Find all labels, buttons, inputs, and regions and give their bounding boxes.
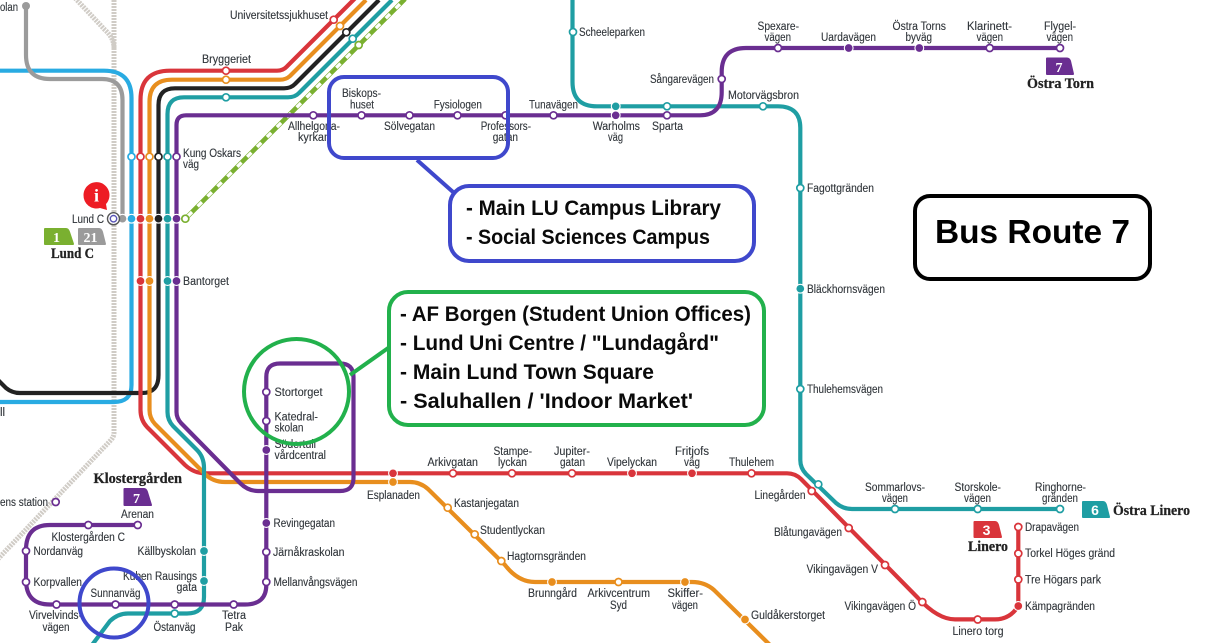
connector: town centre circle to callout [350, 346, 391, 375]
stop labels: north-east: Östra Torns [892, 21, 946, 33]
stop labels: south-east: Ringhorne- [1035, 482, 1086, 494]
highlight: campus stops box [329, 77, 508, 158]
stop labels: west and centre: kyrkan [298, 132, 330, 144]
callout: town centre destinations: - Main Lund Town Square [400, 361, 654, 384]
stop labels: red and orange centre: Brunngård [528, 588, 577, 600]
stops: teal [171, 28, 1063, 617]
stop labels: north-east: Flygel- [1044, 21, 1076, 33]
badge: route 7 Östra Torn [1047, 58, 1073, 76]
stop labels: north-east: Fagottgränden [807, 183, 874, 195]
stop labels: south-west: Tetra [222, 610, 247, 622]
stop labels: west and centre: Biskops- [342, 88, 381, 100]
badge: route 7 Östra Torn: 7 [1056, 61, 1062, 76]
line: gray route [26, 6, 122, 219]
stop labels: west and centre: Bryggeriet [202, 54, 252, 66]
stop labels: south-east: gränden [1042, 493, 1078, 505]
highlight: town centre circle [244, 339, 349, 444]
stop labels: red and orange centre: Thulehem [729, 457, 774, 469]
stop labels: south-west: Klostergården C [52, 532, 125, 544]
stop labels: west and centre: Motorvägsbron [728, 90, 799, 102]
stop labels: north-east: Bläckhornsvägen [807, 284, 885, 296]
stop labels: north-east: byväg [906, 32, 932, 44]
stop labels: north-east: Spexare- [758, 21, 799, 33]
stop labels: west and centre: Fysiologen [434, 100, 482, 112]
stop labels: south-west: Kuben Rausings [123, 571, 197, 583]
stop labels: red and orange centre: gatan [560, 457, 585, 469]
line: light blue route [0, 71, 132, 402]
stop labels: south-west: vägen [42, 622, 70, 634]
stop labels: west and centre: Sölvegatan [384, 121, 435, 133]
stop labels: south-east: vägen [882, 493, 908, 505]
stop labels: west and centre: Allhelgona- [288, 121, 340, 133]
stop labels: south-east: Kämpagränden [1025, 601, 1095, 613]
badge: route 1: 1 [53, 231, 60, 246]
heading: Klostergården: Klostergården [94, 471, 182, 487]
stop labels: south-west: gata [176, 582, 198, 594]
stop labels: red and orange centre: Fritjofs [675, 446, 709, 458]
stop labels: west and centre: Tunavägen [529, 100, 578, 112]
callout: town centre destinations [389, 292, 764, 425]
stop labels: south-west: Korpvallen [34, 577, 82, 589]
stop labels: west and centre: Sparta [652, 121, 684, 133]
stop labels: west and centre: Sångarevägen [650, 74, 714, 86]
highlight: Sunnanväg circle [80, 568, 148, 638]
railway track [0, 0, 114, 560]
stop labels: red and orange centre: Jupiter- [554, 446, 590, 458]
badge: route 6 [1083, 502, 1109, 518]
stop labels: south-west: vårdcentral [274, 450, 326, 462]
heading: Lund C: Lund C [51, 246, 94, 262]
stop labels: south-east: Torkel Höges gränd [1025, 548, 1115, 560]
stop labels: south-east: Linegården [754, 490, 806, 502]
stop labels: west and centre: Lund C [72, 214, 104, 226]
stop labels: west and centre: Warholms [593, 121, 640, 133]
stop labels: red and orange centre: Hagtornsgränden [507, 551, 586, 563]
stop labels: west and centre: gatan [493, 132, 518, 144]
stop labels: south-west: Stortorget [274, 387, 323, 399]
heading: Östra Linero: Östra Linero [1113, 502, 1190, 519]
callout: campus destinations: - Social Sciences Campus [466, 226, 710, 249]
stop labels: north-east: vägen [1046, 32, 1073, 44]
stop labels: west and centre: väg [608, 132, 623, 144]
stop labels: south-east: Sommarlovs- [865, 482, 925, 494]
heading: Östra Torn: Östra Torn [1027, 75, 1094, 92]
stop labels: south-west: Östanväg [154, 622, 196, 634]
stop labels: south-west: Katedral- [274, 412, 318, 424]
icon: information pin: i [94, 186, 99, 206]
stop labels: west and centre: Bantorget [183, 276, 230, 288]
callout: town centre destinations: - Saluhallen / 'Indoor Market' [400, 390, 693, 413]
stop labels: south-east: Tre Högars park [1025, 574, 1101, 586]
stop labels: south-east: Blåtungavägen [774, 527, 842, 539]
stop labels: red and orange centre: Kastanjegatan [454, 498, 519, 510]
stop labels: west and centre: Universitetssjukhuset [230, 10, 329, 22]
stop labels: west and centre: olan [0, 2, 18, 14]
stop labels: south-west: Pak [225, 622, 243, 634]
stop labels: south-west: ens station [0, 497, 48, 509]
line: teal route [92, 0, 392, 643]
badge: route 7 Klostergården: 7 [133, 492, 140, 507]
stop labels: south-east: vägen [964, 493, 991, 505]
title: Bus Route 7 [915, 196, 1150, 279]
badge: route 6: 6 [1091, 502, 1099, 518]
stop labels: south-west: Virvelvinds- [29, 610, 82, 622]
stop labels: red and orange centre: Arkivcentrum [588, 588, 650, 600]
badge: route 21 [79, 229, 105, 246]
stop labels: west and centre: Kung Oskars [183, 148, 241, 160]
stop labels: red and orange centre: lyckan [498, 457, 527, 469]
stop labels: red and orange centre: Syd [610, 600, 627, 612]
line: purple route 7 [26, 48, 1060, 604]
callout: campus destinations: - Main LU Campus Library [466, 197, 721, 220]
line: teal route 6 [572, 0, 1060, 509]
stop labels: south-west: Källbyskolan [138, 546, 196, 558]
stop labels: south-east: Storskole- [954, 482, 1001, 494]
stop labels: red and orange centre: väg [684, 457, 700, 469]
title: Bus Route 7: Bus Route 7 [935, 213, 1130, 250]
stop labels: north-east: Thulehemsvägen [807, 384, 883, 396]
callout: town centre destinations: - AF Borgen (Student Union Offices) [400, 303, 751, 326]
stop labels: south-east: Drapavägen [1025, 522, 1079, 534]
stop labels: south-east: Vikingavägen V [806, 564, 878, 576]
stop labels: red and orange centre: Skiffer- [668, 588, 703, 600]
stop labels: south-west: ll [0, 407, 5, 419]
icon: information pin [83, 182, 109, 210]
stop labels: south-east: Vikingavägen Ö [844, 601, 916, 613]
stop labels: south-west [0, 387, 358, 634]
badge: route 3 [974, 522, 1001, 538]
stop labels: red and orange centre: Stampe- [494, 446, 532, 458]
stop labels: south-west: Järnåkraskolan [273, 547, 344, 559]
stop labels: west and centre: huset [350, 100, 375, 112]
stop labels: south-west: Södertull [274, 439, 316, 451]
stop labels: north-east: Klarinett- [967, 21, 1012, 33]
badge: route 21: 21 [84, 231, 98, 246]
stop labels: red and orange centre: vägen [672, 600, 698, 612]
stop labels: south-west: Revingegatan [274, 518, 335, 530]
badge: route 3: 3 [983, 522, 991, 538]
stop labels: south-west: Arenan [121, 509, 154, 521]
stop labels: west and centre: Scheeleparken [579, 27, 645, 39]
stop labels: south-west: Nordanväg [34, 546, 83, 558]
connector: campus box to callout [417, 160, 453, 192]
stop labels: south-west: skolan [274, 422, 304, 434]
station: Lund C [108, 213, 120, 225]
stop labels: red and orange centre: Vipelyckan [607, 457, 657, 469]
stop labels: south-west: Sunnanväg [90, 588, 140, 600]
stop labels: south-east [751, 482, 1115, 638]
callout: town centre destinations: - Lund Uni Centre / "Lundagård" [400, 332, 719, 355]
line: orange route [150, 0, 770, 643]
stop labels: south-west: Mellanvångsvägen [274, 577, 358, 589]
badge: route 1 [45, 229, 73, 246]
stop labels: north-east: vägen [764, 32, 791, 44]
badge: route 7 Klostergården [124, 489, 151, 507]
stop labels: red and orange centre [367, 446, 774, 612]
line: red route 3 [140, 0, 1018, 619]
stop labels: red and orange centre: Esplanaden [367, 490, 420, 502]
stop labels: red and orange centre: Studentlyckan [480, 525, 545, 537]
line: black route [0, 0, 379, 393]
stop labels: north-east: Uardavägen [821, 32, 876, 44]
stop labels: south-east: Linero torg [952, 626, 1004, 638]
stops: red and orange [118, 16, 1023, 624]
stop labels: red and orange centre: Arkivgatan [428, 457, 478, 469]
stop labels: west and centre: Professors- [481, 121, 531, 133]
stop labels: west and centre [0, 2, 799, 288]
stop labels: south-east: Guldåkerstorget [751, 610, 826, 622]
stop labels: north-east [758, 21, 1076, 396]
heading: Linero: Linero [968, 539, 1008, 555]
line: dashed green route 1 [185, 0, 405, 219]
stop labels: north-east: vägen [976, 32, 1003, 44]
callout: campus destinations [450, 186, 754, 261]
stop labels: west and centre: väg [183, 159, 199, 171]
